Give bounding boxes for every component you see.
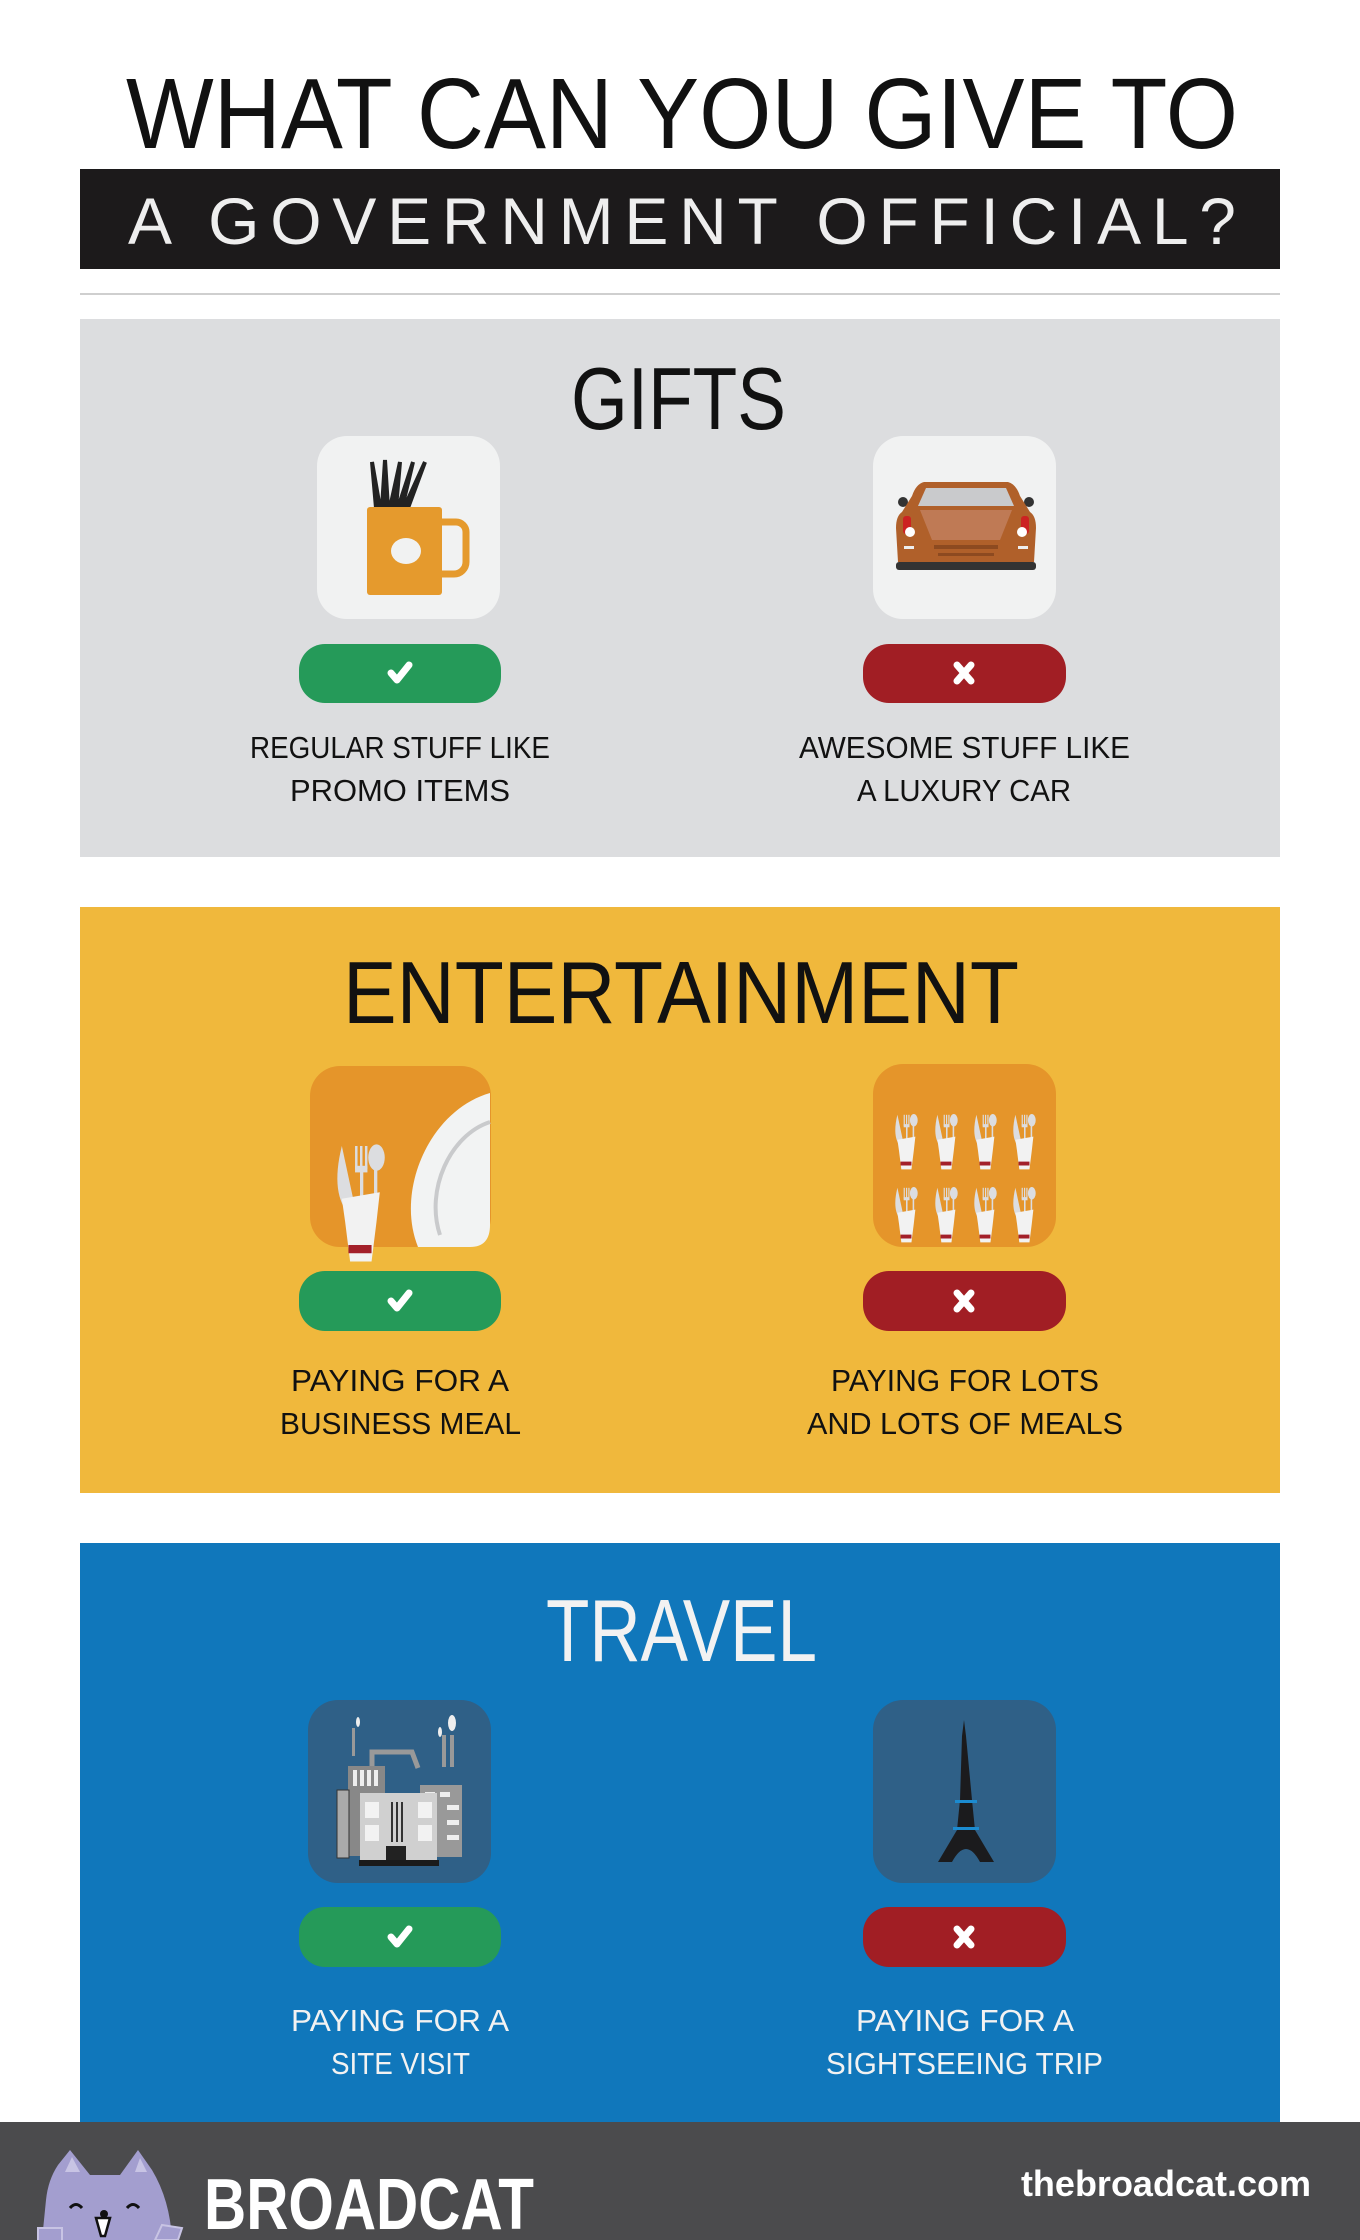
heading: entertainment: ENTERTAINMENT <box>343 943 1019 1042</box>
text: site visit: SITE VISIT <box>331 2046 470 2081</box>
text: lots of meals <box>807 1363 1123 1441</box>
text: regular stuff: PROMO ITEMS <box>290 773 510 808</box>
text: awesome stuff <box>799 730 1130 808</box>
pill: not allowed <box>863 1271 1066 1331</box>
heading: gifts: GIFTS <box>571 349 786 448</box>
text: site visit: PAYING FOR A <box>291 2003 509 2038</box>
text: awesome stuff: A LUXURY CAR <box>857 773 1071 808</box>
website url: thebroadcat.com <box>1021 2163 1311 2204</box>
title banner <box>80 169 1280 269</box>
text: business meal <box>280 1363 521 1441</box>
footer <box>0 2122 1360 2240</box>
text: awesome stuff: AWESOME STUFF LIKE <box>799 730 1130 765</box>
pill: not allowed <box>863 1907 1066 1967</box>
pill: not allowed <box>863 644 1066 703</box>
pill: allowed <box>299 1907 501 1967</box>
text: sightseeing trip: PAYING FOR A <box>856 2003 1074 2038</box>
heading: travel: TRAVEL <box>546 1581 817 1680</box>
text: business meal: BUSINESS MEAL <box>280 1406 521 1441</box>
icon: mug with pens <box>317 436 500 619</box>
pill: allowed <box>299 1271 501 1331</box>
panel: gifts <box>80 319 1280 857</box>
title line 1: WHAT CAN YOU GIVE TO <box>126 58 1238 170</box>
text: site visit <box>291 2003 509 2081</box>
text: regular stuff: REGULAR STUFF LIKE <box>250 730 550 765</box>
icon: eiffel tower <box>873 1700 1056 1883</box>
panel: entertainment <box>80 907 1280 1493</box>
text: lots of meals: PAYING FOR LOTS <box>831 1363 1099 1398</box>
pill: allowed <box>299 644 501 703</box>
text: business meal: PAYING FOR A <box>291 1363 509 1398</box>
icon: many meals <box>873 1064 1056 1247</box>
title banner: A GOVERNMENT OFFICIAL? <box>128 184 1236 258</box>
icon: luxury car <box>873 436 1056 619</box>
text: lots of meals: AND LOTS OF MEALS <box>807 1406 1123 1441</box>
text: regular stuff <box>250 730 550 808</box>
icon: factory <box>308 1700 491 1883</box>
text: sightseeing trip <box>826 2003 1103 2081</box>
icon: plate and cutlery <box>310 1066 491 1262</box>
panel: travel <box>80 1543 1280 2123</box>
text: sightseeing trip: SIGHTSEEING TRIP <box>826 2046 1103 2081</box>
icon: broadcat cat logo <box>38 2150 182 2240</box>
